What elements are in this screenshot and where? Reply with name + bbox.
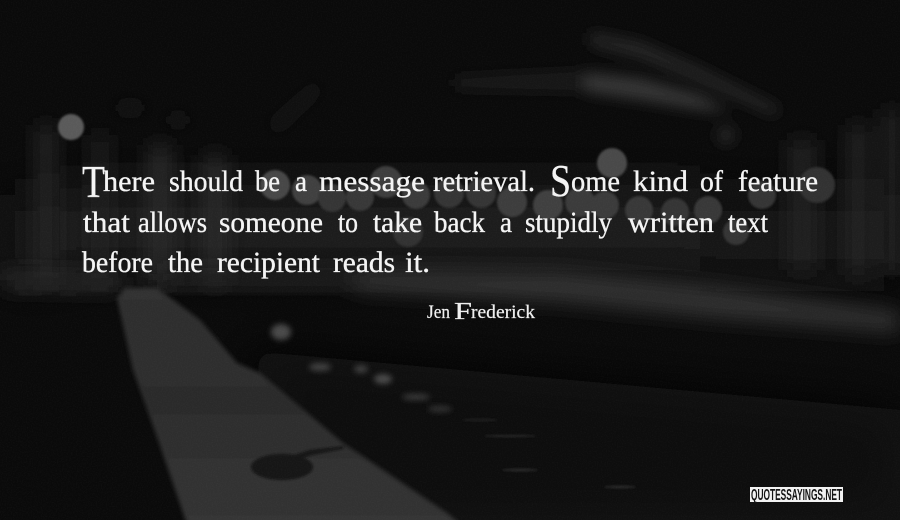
author: Jen [427, 302, 450, 323]
background: vertical light strips [38, 110, 899, 285]
author [427, 299, 536, 325]
quote text [82, 155, 818, 279]
background: horizon light band [0, 270, 900, 332]
quote line 2: that [83, 206, 131, 239]
quote line 1: message [319, 165, 425, 198]
quote line 2: written [628, 206, 714, 239]
quote line 3: it. [405, 246, 430, 279]
quote line 2: stupidly [525, 206, 612, 239]
quote line 1 [82, 155, 818, 207]
quote line 3: before [82, 246, 153, 279]
quote line 1: ome [571, 165, 620, 198]
quote line 1: be [255, 165, 280, 198]
quote line 1: retrieval. [433, 165, 535, 198]
quote line 2: take [373, 206, 422, 239]
quote line 2: text [728, 206, 769, 239]
quote line 2: allows [138, 206, 207, 239]
quote line 1: should [169, 165, 243, 198]
quote line 1: feature [738, 165, 818, 198]
author: F [454, 299, 472, 325]
quote line 1: a [295, 165, 307, 198]
quote line 2: someone [219, 206, 323, 239]
watermark [750, 487, 843, 504]
quote line 3: the [168, 246, 203, 279]
icon: bokeh lights [58, 114, 835, 247]
quote line 2: to [338, 206, 358, 239]
quote line 2 [83, 206, 769, 239]
quote line 3: reads [333, 246, 395, 279]
icon: dark spot on road stripe [251, 446, 345, 480]
quote line 3: recipient [217, 246, 321, 279]
quote line 2: a [500, 206, 512, 239]
quote line 1: here [103, 165, 155, 198]
quote line 1: of [700, 165, 723, 198]
quote line 1: S [550, 155, 571, 206]
background: mid-tone haze [0, 185, 900, 520]
background: top right light streaks [114, 32, 780, 144]
quote line 2: back [434, 206, 485, 239]
quote line 1: kind [633, 165, 688, 198]
background: blurred road marks [271, 324, 452, 412]
quote line 1: T [82, 156, 105, 207]
road stripe [117, 288, 460, 520]
author: rederick [471, 302, 536, 323]
quote line 3 [82, 246, 430, 279]
